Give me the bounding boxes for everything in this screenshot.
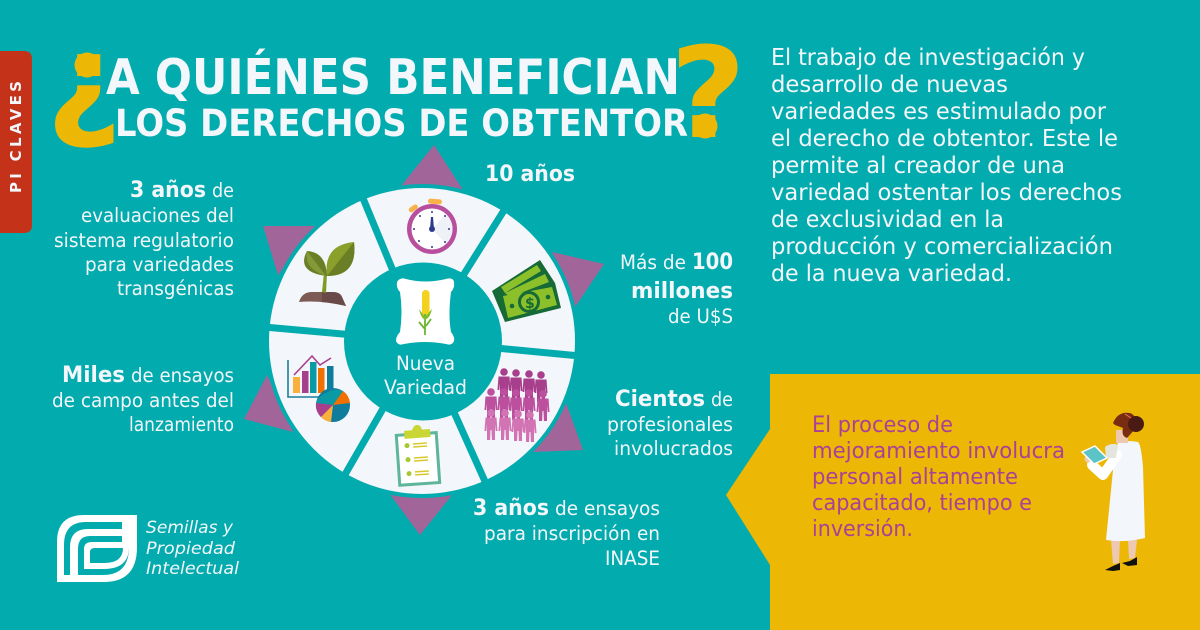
label: 3 años de evaluaciones	[54, 178, 234, 300]
sidebar tab: PI Claves	[0, 51, 32, 233]
ring with six segments	[264, 184, 580, 498]
label: cientos de profesionales: involucrados	[614, 437, 733, 460]
intro paragraph: el derecho de obtentor. Este le	[771, 126, 1118, 152]
label: 3 años de ensayos: INASE	[605, 547, 660, 570]
label: 3 años de evaluaciones: para variedades	[85, 253, 234, 276]
label: 3 años de ensayos: 3 años	[473, 496, 549, 521]
opening question mark: ¿	[46, 6, 122, 153]
center label	[384, 352, 467, 399]
intro paragraph: variedad ostentar los derechos	[771, 180, 1122, 206]
label: cientos de profesionales: de	[711, 388, 733, 411]
label: cientos de profesionales	[607, 387, 733, 460]
sidebar tab: PI Claves: PI CLAVES	[7, 81, 25, 193]
intro paragraph: de la nueva variedad.	[771, 261, 1012, 287]
wheel diagram	[244, 145, 604, 535]
intro paragraph: producción y comercialización	[771, 234, 1113, 260]
label: miles de ensayos	[52, 363, 234, 436]
label: cientos de profesionales: Cientos	[615, 387, 705, 412]
intro paragraph: desarrollo de nuevas	[771, 72, 1008, 98]
label: cientos de profesionales: profesionales	[607, 413, 733, 436]
label: más de 100 millones	[620, 250, 733, 328]
label: miles de ensayos: lanzamiento	[129, 413, 234, 436]
icon: people group	[484, 368, 550, 442]
logo wordmark: Intelectual	[146, 559, 239, 578]
intro paragraph: El trabajo de investigación y	[771, 45, 1085, 71]
arrow triangles	[244, 145, 604, 535]
yellow callout panel	[726, 374, 1200, 630]
intro paragraph: de exclusividad en la	[771, 207, 1004, 233]
icon: sprout	[299, 242, 354, 306]
label: 3 años de ensayos: para inscripción en	[484, 522, 660, 545]
label: más de 100 millones: Más de	[620, 251, 686, 274]
callout text	[812, 412, 1065, 542]
icon: banknotes	[492, 260, 561, 322]
callout text: El proceso de	[812, 412, 953, 438]
label: 3 años de evaluaciones: transgénicas	[117, 277, 234, 300]
closing question mark: ?	[670, 20, 746, 167]
center: seed bag	[396, 278, 454, 345]
label: 3 años de ensayos	[473, 496, 660, 570]
label: más de 100 millones: millones	[631, 279, 733, 304]
logo wordmark	[146, 518, 239, 578]
logo: Semillas y Propiedad Intelectual	[57, 515, 239, 582]
label: miles de ensayos: de ensayos	[131, 364, 234, 387]
label: 3 años de ensayos: de ensayos	[555, 497, 660, 520]
title line 2: LOS DERECHOS DE OBTENTOR	[115, 102, 688, 145]
label: 3 años de evaluaciones: de	[212, 179, 234, 202]
logo wordmark: Semillas y	[146, 518, 233, 537]
intro paragraph	[771, 45, 1122, 287]
callout text: personal altamente	[812, 464, 1018, 490]
logo wordmark: Propiedad	[146, 539, 236, 558]
logo mark	[57, 515, 137, 582]
intro paragraph: variedades es estimulado por	[771, 99, 1107, 125]
callout text: capacitado, tiempo e	[812, 490, 1032, 516]
icon: scientist with tablet	[1082, 413, 1145, 571]
label: miles de ensayos: de campo antes del	[52, 389, 234, 412]
icon: clipboard checklist	[396, 424, 440, 485]
center label: Variedad	[384, 376, 467, 399]
title line 1: A QUIÉNES BENEFICIAN	[106, 47, 680, 106]
label: miles de ensayos: Miles	[62, 363, 125, 388]
icon: stopwatch	[407, 198, 457, 254]
label: más de 100 millones: de U$S	[668, 305, 733, 328]
icon: charts	[288, 356, 350, 422]
title	[46, 6, 746, 167]
icon: banknotes: $	[525, 296, 535, 312]
callout text: mejoramiento involucra	[812, 438, 1065, 464]
label: 3 años de evaluaciones: sistema regulatorio	[54, 229, 234, 252]
intro paragraph: permite al creador de una	[771, 153, 1065, 179]
label: 10 años: 10 años	[485, 162, 575, 187]
center label: Nueva	[396, 352, 455, 375]
label: 3 años de evaluaciones: evaluaciones del	[81, 204, 234, 227]
callout text: inversión.	[812, 516, 913, 542]
label: más de 100 millones: 100	[692, 250, 733, 275]
label: 3 años de evaluaciones: 3 años	[130, 178, 206, 203]
